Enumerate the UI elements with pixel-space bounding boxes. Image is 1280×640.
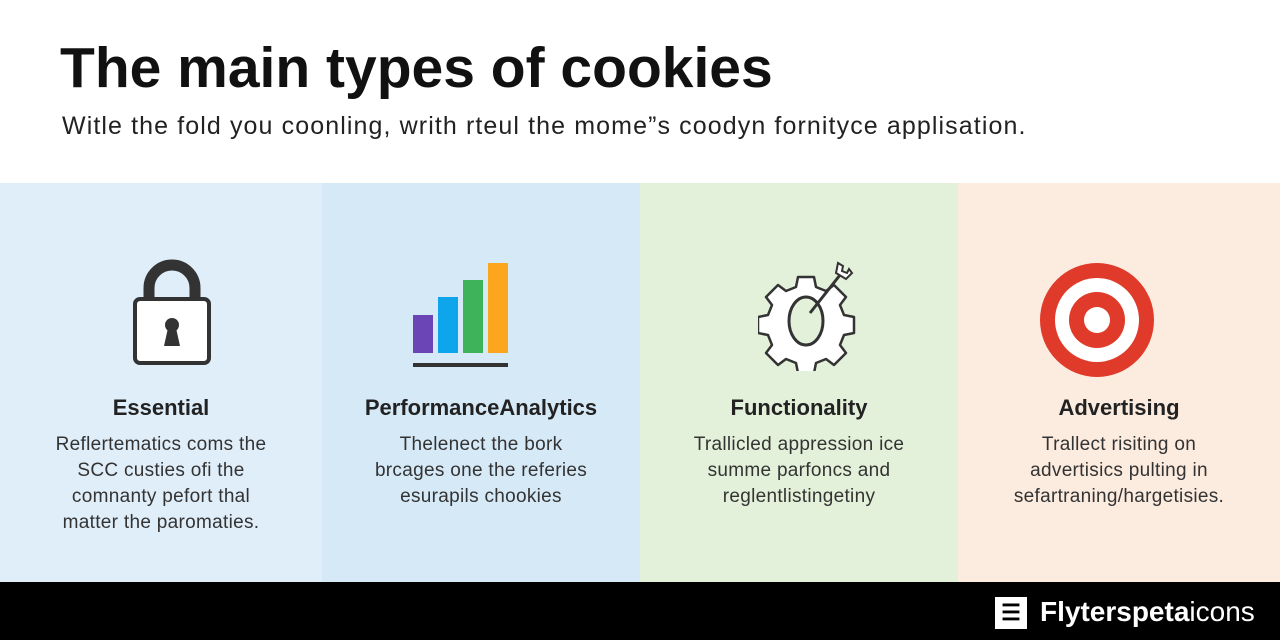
text: essential: matter the paromaties.	[63, 512, 259, 533]
title: The main types of cookies	[60, 36, 773, 100]
text: advertising: sefartraning/hargetisies.	[1014, 486, 1224, 507]
logo	[995, 596, 1255, 629]
footer bar	[0, 582, 1280, 640]
heading: Advertising: Advertising	[1058, 395, 1180, 420]
icon: target	[1040, 263, 1154, 377]
text: performance: esurapils chookies	[400, 486, 562, 507]
text: advertising	[1014, 434, 1224, 507]
text: functionality: Trallicled appression ice	[694, 434, 904, 455]
panel: essential	[0, 183, 322, 582]
panel: functionality	[640, 183, 958, 582]
heading: Essential: Essential	[113, 395, 209, 420]
heading: Functionality: Functionality	[731, 395, 867, 420]
heading: PerformanceAnalytics: PerformanceAnalytics	[365, 395, 597, 420]
panel: performance analytics	[322, 183, 640, 582]
text: performance	[375, 434, 587, 507]
text: essential	[56, 434, 266, 533]
subtitle: Witle the fold you coonling, writh rteul the mome”s coodyn fornityce applisation.	[62, 112, 1027, 140]
text: essential: Reflertematics coms the	[56, 434, 266, 455]
brand text: Flyterspetaicons	[1040, 596, 1255, 627]
icon: logo mark: ☰	[1001, 600, 1021, 625]
icon: padlock	[133, 260, 211, 365]
icon: logo mark	[995, 597, 1027, 629]
text: performance: Thelenect the bork	[400, 434, 562, 455]
text: essential: SCC custies ofi the	[77, 460, 245, 481]
panel: advertising	[958, 183, 1280, 582]
icon: bar chart	[413, 263, 508, 367]
text: advertising: advertisics pulting in	[1030, 460, 1208, 481]
text: advertising: Trallect risiting on	[1042, 434, 1196, 455]
text: functionality	[694, 434, 904, 507]
text: essential: comnanty pefort thal	[72, 486, 250, 507]
text: functionality: reglentlistingetiny	[723, 486, 875, 507]
text: performance: brcages one the referies	[375, 460, 587, 481]
text: functionality: summe parfoncs and	[708, 460, 890, 481]
icon: gear with wrench	[758, 261, 856, 371]
